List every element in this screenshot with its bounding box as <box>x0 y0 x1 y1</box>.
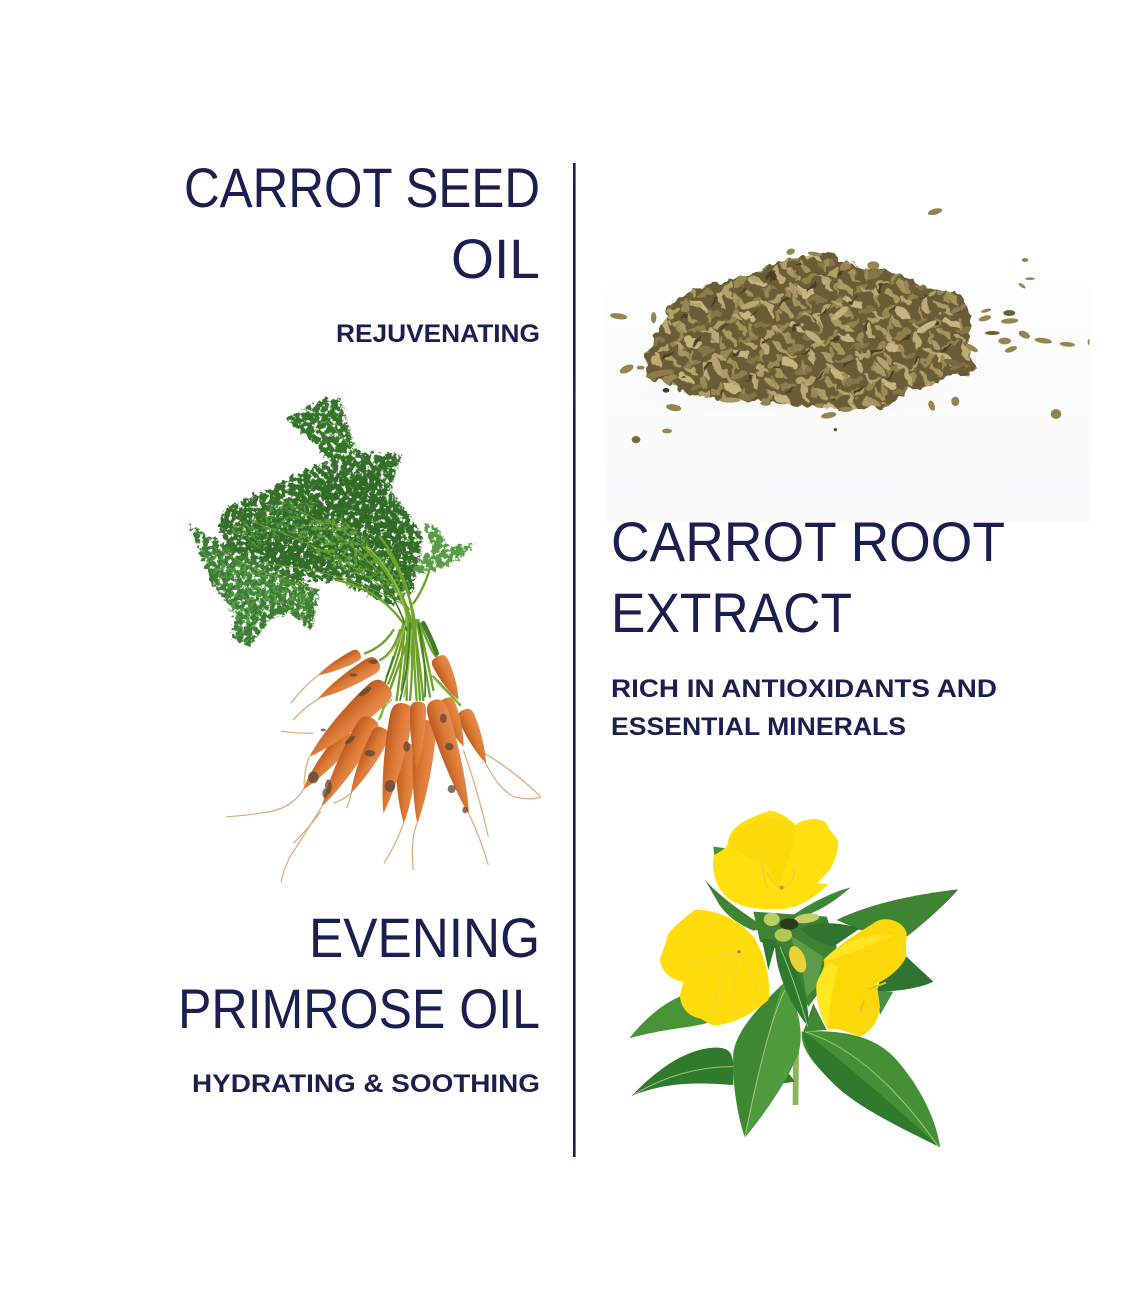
photo: carrot bunch <box>190 399 541 883</box>
carrot foliage <box>190 399 477 645</box>
heading: carrot root extract: EXTRACT <box>611 581 852 644</box>
leaves <box>629 847 958 1147</box>
subheading: rich in antioxidants: RICH IN ANTIOXIDANTS AND <box>611 675 997 703</box>
heading: carrot seed oil: OIL <box>451 227 540 290</box>
subheading: rich in antioxidants <box>611 675 997 741</box>
photo: carrot seeds <box>570 200 1090 522</box>
subheading: rich in antioxidants: ESSENTIAL MINERALS <box>611 713 906 741</box>
photo backdrop <box>606 200 1090 522</box>
stem <box>793 1050 799 1105</box>
heading: carrot seed oil: CARROT SEED <box>184 156 540 219</box>
heading: evening primrose oil <box>178 906 540 1040</box>
heading: carrot root extract <box>611 510 1005 644</box>
flower: top <box>713 811 838 909</box>
leaf veins <box>633 947 938 1147</box>
flower: right <box>816 919 907 1037</box>
foliage: dark mass <box>190 399 477 645</box>
text block: carrot root extract <box>611 510 1005 741</box>
foliage: light fronds <box>200 500 410 637</box>
carrot stems <box>337 537 460 720</box>
flower: left <box>660 909 769 1025</box>
heading: evening primrose oil: PRIMROSE OIL <box>178 977 540 1040</box>
heading: carrot root extract: CARROT ROOT <box>611 510 1005 573</box>
heading: evening primrose oil: EVENING <box>309 906 540 969</box>
heading: carrot seed oil <box>184 156 540 290</box>
subheading: hydrating and soothing: HYDRATING & SOOTHING <box>192 1070 540 1098</box>
flower buds <box>764 912 820 975</box>
roots <box>227 674 541 883</box>
text block: carrot seed oil <box>184 156 540 348</box>
photo: evening primrose <box>629 811 958 1147</box>
seed pile <box>645 252 977 410</box>
carrots <box>296 648 494 824</box>
foliage: dense core <box>247 470 407 583</box>
subheading: rejuvenating: REJUVENATING <box>336 320 540 348</box>
scattered seeds <box>610 207 1090 443</box>
text block: evening primrose oil <box>178 906 540 1098</box>
soil marks <box>308 659 468 813</box>
foliage: midribs <box>213 420 410 610</box>
divider line <box>573 163 576 1157</box>
